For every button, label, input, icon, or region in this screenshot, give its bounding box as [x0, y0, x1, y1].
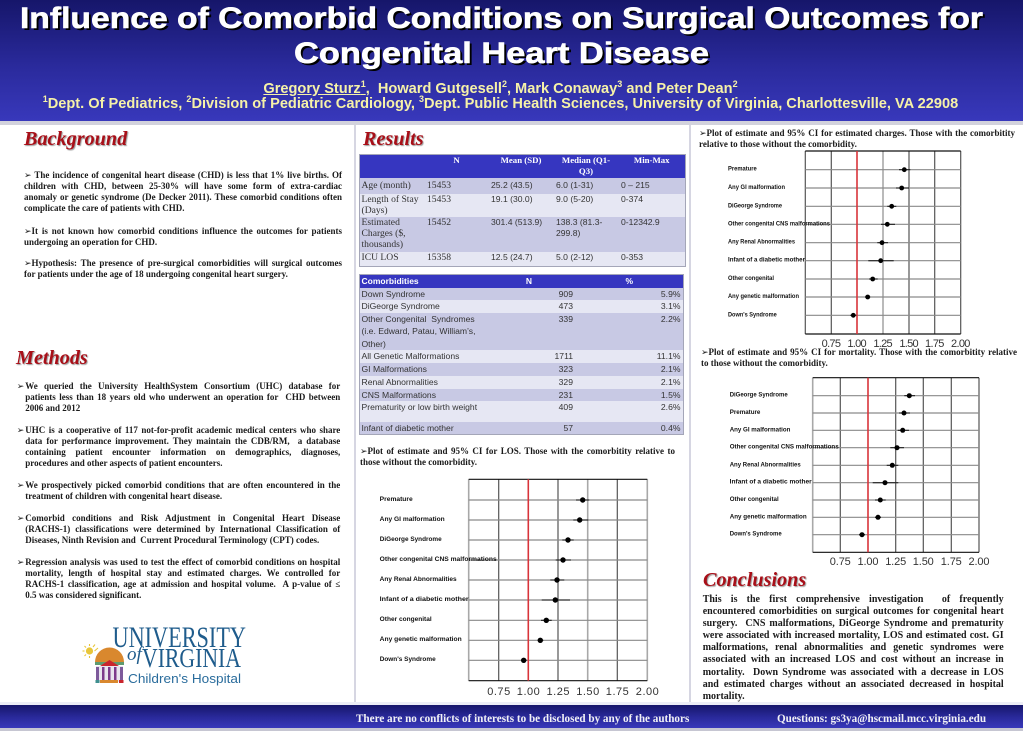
text block: conclusions: This is the first comprehensive investigation of frequently — [703, 594, 1004, 605]
chart: forest plot for mortality: 1.00 — [858, 556, 878, 568]
title line 1: Influence of Comorbid Conditions on Surgical Outcomes for — [20, 2, 983, 35]
table: comorbidities: % — [625, 276, 633, 286]
text block: methods: 0.5 was considered significant. — [25, 590, 141, 600]
table: comorbidities: All Genetic Malformations — [362, 351, 459, 361]
chart: forest plot for mortality: Any GI malformation — [730, 426, 790, 433]
chart: forest plot for estimated charges: 0.75 — [822, 338, 841, 350]
text block: background: ➢ The incidence of congenital heart disease (CHD) is less that 1% live births. Of — [24, 170, 342, 180]
text block: conclusions: mortality. Down Syndrome was associated with a decrease in LOS — [703, 667, 1004, 678]
chart: forest plot for LOS: Any Renal Abnormalities — [380, 576, 457, 583]
table: descriptive statistics: N — [453, 155, 460, 165]
table: comorbidities: 2.1% — [661, 377, 680, 387]
footer: conflict statement: There are no conflicts of interests to be disclosed by any of the authors — [356, 713, 689, 725]
text block: conclusions: and estimated charges without an associated decreased in hospital — [703, 679, 1004, 690]
icon: sun and rotunda — [82, 644, 124, 683]
text block: methods: mortality, length of hospital stay and estimated charges. We controlled for — [25, 568, 340, 578]
text block: background: anomaly or genetic syndrome (De Decker 2011). These comorbid conditions often — [24, 192, 342, 202]
table: descriptive statistics: 25.2 (43.5) — [491, 180, 533, 190]
table: comorbidities: 1711 — [555, 351, 573, 361]
text block: background — [24, 170, 342, 279]
table: comorbidities: 2.6% — [661, 402, 680, 412]
chart: forest plot for mortality: DiGeorge Syndrome — [730, 392, 788, 399]
chart: forest plot for LOS: Down's Syndrome — [380, 656, 436, 663]
caption: LOS plot: ➢Plot of estimate and 95% CI for LOS. Those with the comorbitity relative to — [360, 446, 675, 456]
chart: forest plot for estimated charges: 1.75 — [925, 338, 944, 350]
table: descriptive statistics: 15453 — [427, 194, 451, 204]
table: comorbidities: 0.4% — [661, 423, 680, 433]
text block: methods: 2006 and 2012 — [25, 403, 80, 413]
text block: methods: treatment of children with congenital heart disease. — [25, 491, 222, 501]
table: comorbidities: 11.1% — [657, 351, 680, 361]
table: comorbidities: 329 — [559, 377, 573, 387]
chart: forest plot for LOS: Infant of a diabetic mother — [380, 596, 469, 603]
chart: forest plot for mortality: 1.75 — [941, 556, 962, 568]
table: descriptive statistics: ICU LOS — [362, 252, 399, 262]
table: descriptive statistics: 6.0 (1-31) — [556, 180, 593, 190]
table: comorbidities: Prematurity or low birth weight — [362, 402, 477, 412]
heading: Methods: Methods — [16, 347, 88, 369]
chart: forest plot for mortality: 1.25 — [885, 556, 906, 568]
chart: forest plot for mortality: Any Renal Abnormalities — [730, 461, 801, 468]
chart: forest plot for LOS: 1.25 — [546, 686, 570, 698]
table: comorbidities: N — [526, 276, 532, 286]
text block: conclusions — [702, 594, 1004, 702]
caption: LOS plot: those without the comorbidity. — [360, 457, 477, 467]
title line 2: Congenital Heart Disease — [294, 37, 709, 70]
table: comorbidities: 473 — [559, 301, 573, 311]
table: comorbidities: 57 — [563, 423, 573, 433]
text block: methods: We prospectively picked comorbid conditions that are often encountered in the — [25, 480, 340, 490]
table: descriptive statistics: Mean (SD) — [501, 155, 541, 165]
chart: forest plot for mortality: 1.50 — [913, 556, 934, 568]
text block: methods: patients less than 18 years old who underwent an operation for CHD between — [25, 392, 340, 402]
chart: forest plot for mortality: Other congenital — [730, 496, 779, 503]
table: descriptive statistics: Age (month) — [362, 180, 411, 191]
table: descriptive statistics: 0-12342.9 — [621, 216, 660, 226]
table: descriptive statistics: 15452 — [427, 216, 451, 228]
chart: forest plot for LOS: Any genetic malformation — [380, 636, 462, 643]
chart: forest plot for mortality: Down's Syndrome — [730, 531, 782, 538]
table: comorbidities: 339 — [559, 314, 573, 324]
header banner — [0, 0, 1023, 121]
table: comorbidities: GI Malformations — [362, 364, 427, 374]
table: descriptive statistics: 0-374 — [621, 194, 643, 204]
chart: forest plot for estimated charges: Infant of a diabetic mother — [728, 257, 805, 264]
text block: background: complicate the care of patients with CHD. — [24, 203, 185, 213]
table: comorbidities: 909 — [559, 288, 573, 298]
chart: forest plot for estimated charges: Other congenital CNS malformations — [728, 220, 830, 227]
table: comorbidities: Other Congenital Syndromes (i.e. Edward, Patau, William’s, Other) — [362, 314, 476, 349]
table: comorbidities: Comorbidities — [362, 276, 419, 286]
footer: contact: Questions: gs3ya@hscmail.mcc.virginia.edu — [777, 713, 986, 725]
chart: forest plot for estimated charges: Any Renal Abnormalities — [728, 239, 795, 246]
table: comorbidities: 323 — [559, 364, 573, 374]
caption: LOS plot — [360, 446, 675, 467]
table: descriptive statistics — [359, 154, 686, 267]
table: descriptive statistics: 5.0 (2-12) — [556, 252, 593, 262]
chart: forest plot for LOS: 1.50 — [576, 686, 599, 698]
chart: forest plot for LOS — [380, 478, 659, 698]
text block: background: ➢It is not known how comorbid conditions influence the outcomes for patients — [24, 226, 342, 236]
chart: forest plot for LOS: Any GI malformation — [380, 516, 445, 523]
chart: forest plot for mortality: Premature — [730, 409, 761, 416]
caption: charges plot: relative to those without the comorbidity. — [699, 139, 857, 149]
chart: forest plot for mortality: Any genetic malformation — [730, 513, 807, 520]
chart: forest plot for LOS: 1.00 — [517, 686, 540, 698]
chart: forest plot for mortality: 2.00 — [968, 556, 990, 568]
chart: forest plot for estimated charges: 1.50 — [899, 338, 919, 350]
text block: methods: containing patient encounter information on demographics, diagnoses, — [25, 447, 340, 457]
text block: conclusions: associated with an increased LOS and cost without an increase in — [703, 654, 1004, 665]
chart: forest plot for estimated charges: 1.00 — [847, 338, 867, 350]
table: comorbidities: CNS Malformations — [362, 390, 436, 400]
text block: methods: ➢ — [17, 513, 24, 523]
text block: methods: Regression analysis was used to test the effect of comorbid conditions on hospital — [25, 557, 340, 567]
text block: methods: UHC is a cooperative of 117 not-for-profit academic medical centers who share — [25, 425, 340, 435]
logo wordmark: of — [127, 644, 144, 665]
text block: conclusions: mortality. — [703, 691, 745, 702]
chart: forest plot for mortality: 0.75 — [830, 556, 851, 568]
table: descriptive statistics: 15453 — [427, 180, 451, 191]
chart: forest plot for estimated charges: Other congenital — [728, 275, 774, 282]
chart: forest plot for mortality — [730, 377, 990, 568]
heading: Conclusions: Conclusions — [703, 569, 806, 591]
chart: forest plot for LOS: 0.75 — [487, 686, 510, 698]
chart: forest plot for LOS: Premature — [380, 496, 413, 503]
table: descriptive statistics: 0 – 215 — [621, 180, 650, 190]
chart: forest plot for estimated charges: 2.00 — [951, 338, 970, 350]
chart: forest plot for LOS: Other congenital CNS malformations — [380, 556, 497, 563]
table: descriptive statistics: Q3) — [579, 166, 593, 176]
authors: Gregory Sturz1, Howard Gutgesell2, Mark Conaway3 and Peter Dean2 — [263, 79, 738, 97]
table: comorbidities: 231 — [559, 390, 573, 400]
text block: background: children with CHD, between 25-30% will have some form of extra-cardiac — [24, 181, 342, 191]
heading: Background: Background — [24, 128, 127, 150]
chart: forest plot for estimated charges: Down's Syndrome — [728, 311, 777, 318]
table: descriptive statistics: Min-Max — [634, 155, 670, 165]
text block: methods: ➢ — [17, 480, 24, 490]
text block: methods: RACHS-1 classification, age at admission and hospital volume. A p-value of ≤ — [25, 579, 340, 589]
table: descriptive statistics: 12.5 (24.7) — [491, 252, 533, 262]
text block: methods — [17, 381, 340, 600]
table: comorbidities: 409 — [559, 402, 573, 412]
table: comorbidities — [359, 274, 684, 435]
caption: mortality plot: to those without the comorbidity. — [701, 358, 828, 368]
heading: Results: Results — [363, 128, 424, 150]
table: comorbidities: Infant of diabetic mother — [362, 423, 454, 433]
chart: forest plot for estimated charges: 1.25 — [873, 338, 893, 350]
text block: methods: ➢ — [17, 381, 24, 391]
table: descriptive statistics: 19.1 (30.0) — [491, 194, 533, 204]
table: descriptive statistics: 138.3 (81.3-299.8) — [556, 216, 602, 238]
table: descriptive statistics: Length of Stay (Days) — [362, 194, 419, 216]
chart: forest plot for LOS: 1.75 — [606, 686, 629, 698]
table: comorbidities: DiGeorge Syndrome — [362, 301, 440, 311]
footer bar — [0, 705, 1023, 728]
table: comorbidities: 3.1% — [661, 301, 680, 311]
table: comorbidities: 1.5% — [661, 390, 680, 400]
table: comorbidities: 2.1% — [661, 364, 680, 374]
affiliations: 1Dept. Of Pediatrics, 2Division of Pediatric Cardiology, 3Dept. Public Health Sciences, University of Virginia, Charlottesville, VA 22908 — [43, 94, 958, 112]
table: comorbidities: Renal Abnormalities — [362, 377, 438, 387]
logo wordmark — [112, 625, 246, 686]
caption: charges plot — [699, 128, 1015, 149]
chart: forest plot for LOS: 2.00 — [636, 686, 659, 698]
text block: methods: ➢ — [17, 557, 24, 567]
caption: mortality plot — [701, 347, 1017, 368]
table: comorbidities: Down Syndrome — [362, 288, 425, 298]
table: comorbidities: 2.2% — [661, 314, 680, 324]
text block: methods: procedures and other aspects of patient encounters. — [25, 458, 223, 468]
table: descriptive statistics: 301.4 (513.9) — [491, 216, 542, 226]
text block: methods: (RACHS-1) classifications were determined by International Classification of — [25, 524, 340, 534]
text block: methods: Comorbid conditions and Risk Adjustment in Congenital Heart Disease — [25, 513, 340, 523]
chart: forest plot for estimated charges — [728, 150, 970, 350]
chart: forest plot for estimated charges: Any GI malformation — [728, 184, 785, 191]
text block: conclusions: surgery. CNS malformations, DiGeorge Syndrome and prematurity — [703, 618, 1004, 629]
chart: forest plot for mortality: Infant of a diabetic mother — [730, 479, 812, 486]
text block: conclusions: encountered comorbidities on surgical outcomes for congenital heart — [703, 606, 1004, 617]
chart: forest plot for estimated charges: DiGeorge Syndrome — [728, 202, 782, 209]
text block: background: for patients under the age of 18 undergoing congenital heart surgery. — [24, 269, 288, 279]
chart: forest plot for LOS: DiGeorge Syndrome — [380, 536, 442, 543]
chart: forest plot for estimated charges: Premature — [728, 166, 757, 173]
text block: conclusions: were associated with increased mortality, LOS and estimated cost. GI — [703, 630, 1004, 641]
text block: methods: Diseases, Ninth Revision and Current Procedural Terminology (CPT) codes. — [25, 535, 319, 545]
table: comorbidities: 5.9% — [661, 288, 680, 298]
caption: mortality plot: ➢Plot of estimate and 95% CI for mortality. Those with the comorbitity relative — [701, 347, 1017, 357]
table: descriptive statistics: Estimated Charges ($, thousands) — [362, 216, 406, 250]
table: descriptive statistics: 9.0 (5-20) — [556, 194, 593, 204]
chart: forest plot for estimated charges: Any genetic malformation — [728, 293, 799, 300]
caption: charges plot: ➢Plot of estimate and 95% CI for estimated charges. Those with the comorbitity — [699, 128, 1015, 138]
logo: University of Virginia Children's Hospital — [82, 625, 246, 686]
text block: methods: ➢ — [17, 425, 24, 435]
text block: methods: We queried the University HealthSystem Consortium (UHC) database for — [25, 381, 340, 391]
text block: conclusions: malformations, renal abnormalities and genetic syndromes were — [703, 642, 1004, 653]
chart: forest plot for LOS: Other congenital — [380, 616, 432, 623]
text block: background: ➢Hypothesis: The presence of pre-surgical comorbidities will surgical outcomes — [24, 258, 342, 268]
logo wordmark: Children's Hospital — [128, 672, 241, 686]
chart: forest plot for mortality: Other congenital CNS malformations — [730, 444, 839, 451]
text block: methods: data for performance improvement. They maintain the CDB/RM, a database — [25, 436, 340, 446]
table: descriptive statistics: Median (Q1- — [562, 155, 610, 165]
table: descriptive statistics: 0-353 — [621, 252, 643, 262]
text block: background: undergoing an operation for CHD. — [24, 236, 157, 246]
table: descriptive statistics: 15358 — [427, 252, 451, 262]
